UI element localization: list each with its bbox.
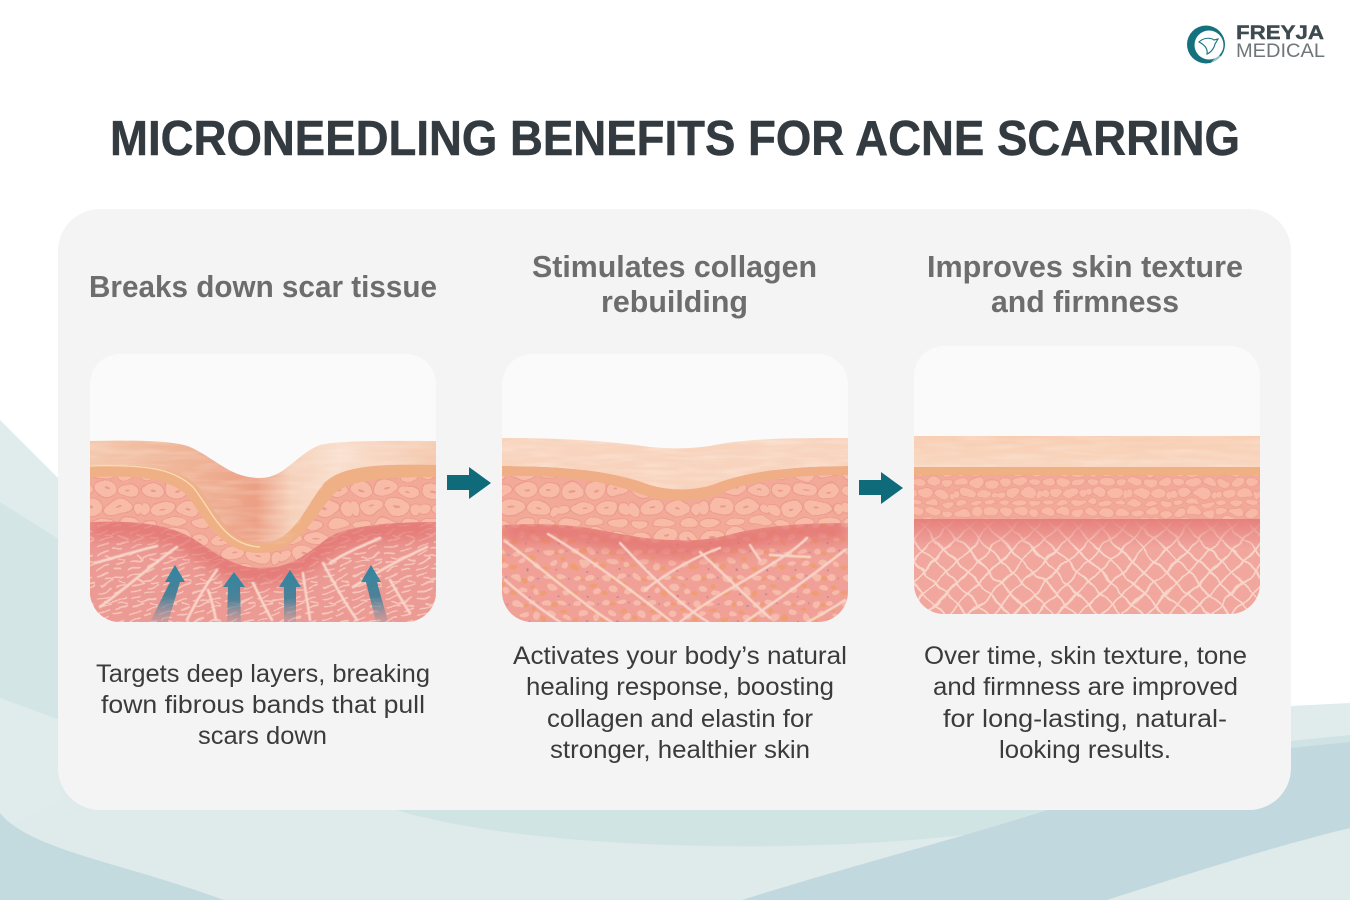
description: breaks down scar tissue [96, 660, 430, 750]
cell layer [914, 475, 1260, 519]
heading: stimulates collagen rebuilding: rebuilding [601, 284, 748, 319]
orange band [90, 464, 436, 553]
epidermis [90, 441, 436, 543]
arrow: step one to two [447, 467, 491, 499]
logo: Freyja Medical [1187, 23, 1325, 64]
description: improves skin texture and firmness [924, 642, 1247, 764]
logo wordmark: MEDICAL [1236, 41, 1325, 62]
description: breaks down scar tissue: fown fibrous bands that pull [101, 691, 425, 719]
logo wordmark [1236, 23, 1325, 62]
description: stimulates collagen rebuilding: stronger, healthier skin [550, 736, 810, 764]
description: improves skin texture and firmness: looking results. [999, 736, 1171, 764]
cell layer [502, 470, 848, 540]
column: improves skin texture and firmness [904, 249, 1270, 764]
arrow: step two to three [859, 472, 903, 504]
description: improves skin texture and firmness: and firmness are improved [933, 673, 1238, 701]
column: breaks down scar tissue [80, 269, 446, 750]
icon: logo ring [1187, 26, 1226, 64]
description: stimulates collagen rebuilding: Activates your body’s natural [513, 642, 847, 670]
panel: main card [58, 209, 1291, 810]
description: stimulates collagen rebuilding: collagen and elastin for [547, 705, 813, 733]
description: improves skin texture and firmness: for long-lasting, natural- [943, 705, 1227, 733]
description: improves skin texture and firmness: Over time, skin texture, tone [924, 642, 1247, 670]
heading: improves skin texture and firmness: Improves skin texture [927, 249, 1243, 284]
epidermis [502, 438, 848, 489]
cell layer [90, 470, 436, 568]
column: stimulates collagen rebuilding [492, 249, 858, 764]
heading: improves skin texture and firmness [927, 249, 1243, 319]
description: stimulates collagen rebuilding [513, 642, 847, 764]
upward arrows [150, 565, 388, 622]
title: MICRONEEDLING BENEFITS FOR ACNE SCARRING [110, 112, 1240, 166]
epidermis [914, 436, 1260, 467]
heading: stimulates collagen rebuilding: Stimulates collagen [532, 249, 817, 284]
heading: breaks down scar tissue: Breaks down scar tissue [89, 269, 437, 304]
orange band [914, 467, 1260, 475]
skin illustration: shallower scar [502, 438, 848, 622]
logo wordmark: FREYJA [1236, 23, 1324, 44]
description: breaks down scar tissue: Targets deep layers, breaking [96, 660, 430, 688]
description: breaks down scar tissue: scars down [198, 722, 327, 750]
description: stimulates collagen rebuilding: healing response, boosting [526, 673, 834, 701]
heading: improves skin texture and firmness: and firmness [991, 284, 1179, 319]
skin illustration: smooth skin [914, 436, 1260, 614]
orange band [502, 466, 848, 501]
heading: stimulates collagen rebuilding [532, 249, 817, 319]
skin illustration: deep scar [90, 440, 436, 622]
